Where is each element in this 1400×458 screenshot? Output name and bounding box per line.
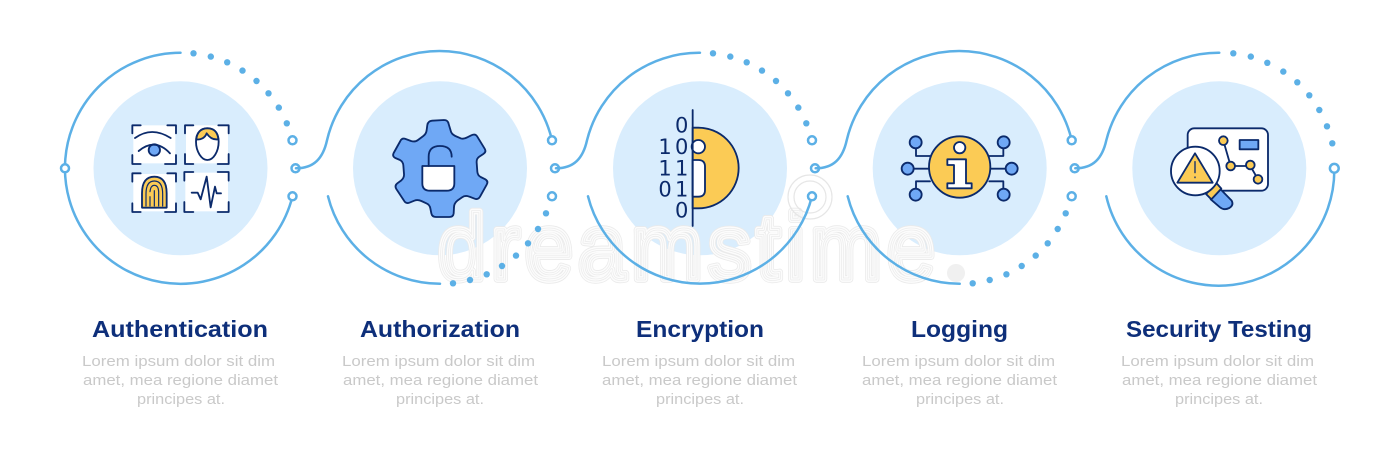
icon: binary info half circle bbox=[658, 110, 739, 226]
icon: binary info half circle: 1 bbox=[675, 178, 688, 202]
text: logging description: Lorem ipsum dolor sit dim bbox=[862, 353, 1055, 370]
heading: Authorization: Authorization bbox=[360, 316, 520, 342]
panel: logging bbox=[816, 51, 1079, 408]
watermark: dreamstime bbox=[438, 195, 935, 299]
text: logging description: principes at. bbox=[916, 391, 1004, 408]
watermark: dreamstime bbox=[438, 195, 935, 299]
icon: biometrics bbox=[132, 125, 229, 212]
watermark: dreamstime bbox=[438, 195, 935, 299]
text: security testing description: Lorem ipsum dolor sit dim bbox=[1121, 353, 1314, 370]
icon: binary info half circle: 0 bbox=[675, 113, 688, 137]
ring diagram: encryption bbox=[556, 50, 819, 284]
text: logging description bbox=[862, 353, 1058, 408]
icon: binary info half circle: 1 bbox=[675, 157, 688, 181]
ring diagram: logging bbox=[816, 51, 1079, 287]
text: authentication description bbox=[82, 353, 279, 408]
text: authentication description: principes at. bbox=[137, 391, 225, 408]
icon: magnifier with warning over chart bbox=[1171, 128, 1268, 209]
text: security testing description: amet, mea regione diamet bbox=[1122, 372, 1318, 389]
panel: encryption bbox=[556, 50, 819, 408]
text: authorization description: Lorem ipsum dolor sit dim bbox=[342, 353, 535, 370]
icon: binary info half circle: 0 bbox=[675, 135, 688, 159]
text: authorization description bbox=[342, 353, 539, 408]
panel: authorization bbox=[296, 51, 559, 408]
watermark: dreamstime bbox=[438, 195, 935, 299]
text: logging description: amet, mea regione diamet bbox=[862, 372, 1058, 389]
icon: info network bbox=[902, 136, 1018, 201]
icon: binary info half circle: 0 bbox=[658, 178, 672, 202]
text: security testing description bbox=[1121, 353, 1318, 408]
text: security testing description: principes at. bbox=[1175, 391, 1263, 408]
icon: binary info half circle: 0 bbox=[675, 199, 688, 223]
heading: Encryption: Encryption bbox=[636, 316, 764, 342]
panel: security testing bbox=[1075, 50, 1339, 408]
text: authorization description: principes at. bbox=[396, 391, 484, 408]
text: encryption description: amet, mea regione diamet bbox=[602, 372, 798, 389]
heading: Security Testing: Security Testing bbox=[1126, 316, 1312, 342]
icon: binary info half circle: 1 bbox=[658, 135, 672, 159]
text: encryption description: principes at. bbox=[656, 391, 744, 408]
heading: Authentication: Authentication bbox=[92, 316, 268, 342]
inner pale blue circles bbox=[94, 81, 1306, 255]
text: authentication description: amet, mea regione diamet bbox=[83, 372, 279, 389]
text: encryption description bbox=[602, 353, 798, 408]
ring diagram: security testing bbox=[1075, 50, 1339, 286]
text: authorization description: amet, mea regione diamet bbox=[343, 372, 539, 389]
ring diagram: authentication bbox=[61, 50, 300, 284]
panel: authentication bbox=[61, 50, 300, 408]
icon: binary info half circle: 1 bbox=[658, 157, 672, 181]
heading: Logging: Logging bbox=[911, 316, 1008, 342]
ring diagram: authorization bbox=[296, 51, 559, 287]
text: encryption description: Lorem ipsum dolor sit dim bbox=[602, 353, 795, 370]
icon: gear with open lock bbox=[393, 120, 487, 217]
text: authentication description: Lorem ipsum dolor sit dim bbox=[82, 353, 275, 370]
